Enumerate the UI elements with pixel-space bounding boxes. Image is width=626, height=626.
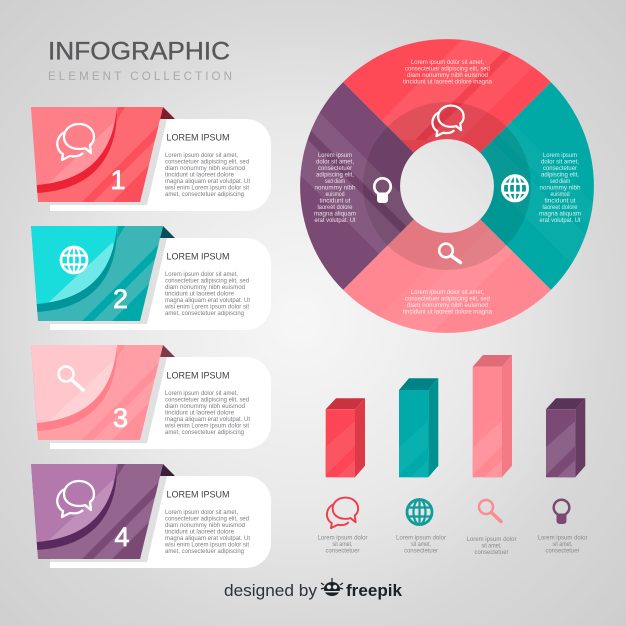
text block: diam nonummy nibh euismod — [165, 284, 245, 291]
footer credit: freepik — [346, 581, 403, 600]
number 1: 1 — [110, 165, 126, 195]
text: left segment: laoreet dolore — [318, 204, 353, 211]
text: top segment: diam nonummy nibh euismod — [407, 72, 488, 79]
text block: wisi enim Lorem ipsum dolor sit — [164, 184, 249, 192]
title: INFOGRAPHIC — [48, 38, 230, 66]
caption 1: Lorem ipsum dolor — [318, 534, 368, 542]
text block: wisi enim Lorem ipsum dolor sit — [164, 542, 249, 548]
subtitle: ELEMENT COLLECTION — [48, 70, 232, 83]
bar: purple — [546, 398, 585, 477]
icon: chat — [432, 106, 464, 136]
text: right segment: consectetuer — [543, 165, 577, 172]
text: left segment: nonummy nibh — [314, 184, 356, 192]
text block: consectetuer adipiscing elit, sed — [165, 396, 249, 404]
caption 1: sit amet, — [332, 541, 353, 548]
number 3: 3 — [113, 403, 128, 433]
text: right segment: tincidunt ut — [544, 198, 576, 204]
panel: step 4 — [30, 462, 271, 568]
caption 2 — [396, 534, 446, 554]
caption 2: sit amet, — [411, 541, 431, 548]
text block — [164, 390, 250, 436]
donut chart — [300, 39, 594, 333]
icon: chat — [57, 124, 94, 160]
text block: consectetuer adipiscing elit, sed — [165, 516, 249, 522]
icon: globe — [61, 247, 87, 273]
segment: bottom pink — [343, 219, 551, 333]
text block: magna aliquam erat volutpat. Ut — [165, 297, 250, 304]
caption 4: consectetuer — [546, 548, 580, 554]
segment: left purple — [300, 82, 414, 290]
icon: magnifier — [58, 366, 83, 390]
text: right segment — [539, 152, 581, 224]
text: bottom segment: diam nonummy nibh euismod — [407, 302, 488, 309]
text block — [164, 152, 250, 198]
text: right segment: laoreet dolore — [542, 204, 578, 211]
text: right segment: adipiscing elit, — [541, 172, 579, 178]
icon: chat — [57, 481, 94, 517]
text block: consectetuer adipiscing elit, sed — [165, 158, 249, 166]
caption 2: consectetuer — [404, 548, 438, 554]
panel: step 1 — [30, 105, 271, 211]
text: bottom segment: consectetuer adipiscing elit, sed — [405, 296, 490, 302]
footer credit — [224, 578, 403, 600]
text: left segment: Lorem ipsum — [318, 152, 352, 159]
caption 3 — [466, 536, 516, 556]
text: right segment: magna aliquam — [539, 210, 581, 218]
caption 2: Lorem ipsum dolor — [396, 534, 446, 542]
icon: purple bulb — [554, 500, 569, 524]
icon: freepik bee — [321, 578, 343, 596]
text: left segment: dolor sit amet, — [316, 158, 354, 166]
text block: wisi enim Lorem ipsum dolor sit — [164, 422, 249, 430]
panel: step 2 — [30, 224, 271, 330]
text: right segment: euismod — [550, 191, 570, 198]
bar: teal — [399, 378, 438, 477]
text: right segment: erat volutpat. Ut — [540, 217, 581, 224]
caption 4: Lorem ipsum dolor — [538, 534, 588, 542]
text block: diam nonummy nibh euismod — [165, 165, 245, 172]
text block: amet, consectetuer adipiscing — [165, 429, 244, 436]
text block: amet, consectetuer adipiscing — [165, 310, 244, 317]
text block: Lorem ipsum dolor sit amet, — [165, 390, 238, 397]
caption 4 — [538, 534, 588, 554]
caption 4: sit amet, — [552, 541, 573, 548]
caption 3: Lorem ipsum dolor — [466, 536, 516, 543]
text: left segment: adipiscing elit, — [316, 172, 354, 178]
heading: LOREM IPSUM — [166, 490, 230, 500]
number 4: 4 — [114, 522, 130, 552]
text: top segment: tincidunt ut laoreet dolore magna — [403, 78, 492, 86]
text block: diam nonummy nibh euismod — [165, 522, 245, 529]
bar: red — [326, 398, 365, 477]
text block: Lorem ipsum dolor sit amet, — [165, 509, 238, 516]
heading: LOREM IPSUM — [166, 252, 230, 262]
heading: LOREM IPSUM — [166, 132, 230, 144]
icon: globe — [502, 175, 528, 201]
text: left segment: magna aliquam — [314, 210, 356, 218]
caption 1: consectetuer — [326, 548, 360, 554]
text block: tincidunt ut laoreet dolore — [165, 528, 234, 536]
text block: consectetuer adipiscing elit, sed — [165, 278, 249, 284]
bar: pink — [473, 355, 512, 477]
text: left segment — [314, 152, 356, 224]
text block: Lorem ipsum dolor sit amet, — [165, 271, 238, 278]
text: bottom segment: Lorem ipsum dolor sit amet, — [411, 289, 484, 296]
icon: bulb — [374, 178, 391, 203]
text block: tincidunt ut laoreet dolore — [165, 290, 234, 298]
text: top segment — [403, 59, 492, 86]
icon: red chat — [327, 498, 358, 528]
caption 3: consectetuer — [474, 549, 508, 556]
text: right segment: Lorem ipsum — [543, 152, 577, 159]
text block: magna aliquam erat volutpat. Ut — [165, 416, 250, 423]
text: left segment: consectetuer — [318, 165, 352, 172]
heading: LOREM IPSUM — [166, 370, 230, 382]
text: left segment: euismod — [326, 191, 345, 198]
footer credit: designed by — [224, 581, 318, 600]
text block: magna aliquam erat volutpat. Ut — [165, 178, 250, 185]
text block: tincidunt ut laoreet dolore — [165, 410, 234, 416]
text block: diam nonummy nibh euismod — [165, 403, 245, 410]
text: right segment: nonummy nibh — [540, 184, 581, 192]
icon: pink magnifier — [479, 500, 501, 522]
text block: wisi enim Lorem ipsum dolor sit — [164, 304, 249, 310]
text block — [164, 271, 250, 317]
text block: tincidunt ut laoreet dolore — [165, 172, 234, 178]
text block: amet, consectetuer adipiscing — [165, 191, 244, 198]
text: bottom segment: tincidunt ut laoreet dolore magna — [403, 308, 492, 316]
text block: Lorem ipsum dolor sit amet, — [165, 152, 238, 159]
panel: step 3 — [30, 343, 271, 449]
caption 3: sit amet, — [482, 542, 502, 550]
inner ring shade — [382, 120, 512, 252]
text: bottom segment — [403, 289, 492, 316]
text: right segment: dolor sit amet, — [541, 158, 579, 166]
text block: magna aliquam erat volutpat. Ut — [165, 535, 250, 542]
text: left segment: tincidunt ut — [320, 198, 351, 204]
text block: amet, consectetuer adipiscing — [165, 548, 244, 555]
text: left segment: erat volutpat. Ut — [314, 217, 356, 224]
segment: top red — [343, 39, 551, 153]
icon: teal globe — [407, 499, 432, 525]
text: left segment: sed diam — [325, 178, 345, 185]
icon: magnifier — [439, 244, 460, 262]
text: right segment: sed diam — [550, 178, 570, 185]
caption 1 — [318, 534, 368, 554]
text block — [164, 509, 250, 555]
text: top segment: Lorem ipsum dolor sit amet, — [411, 59, 484, 66]
segment: right teal — [480, 82, 600, 292]
number 2: 2 — [113, 284, 128, 314]
text: top segment: consectetuer adipiscing elit, sed — [405, 66, 490, 72]
